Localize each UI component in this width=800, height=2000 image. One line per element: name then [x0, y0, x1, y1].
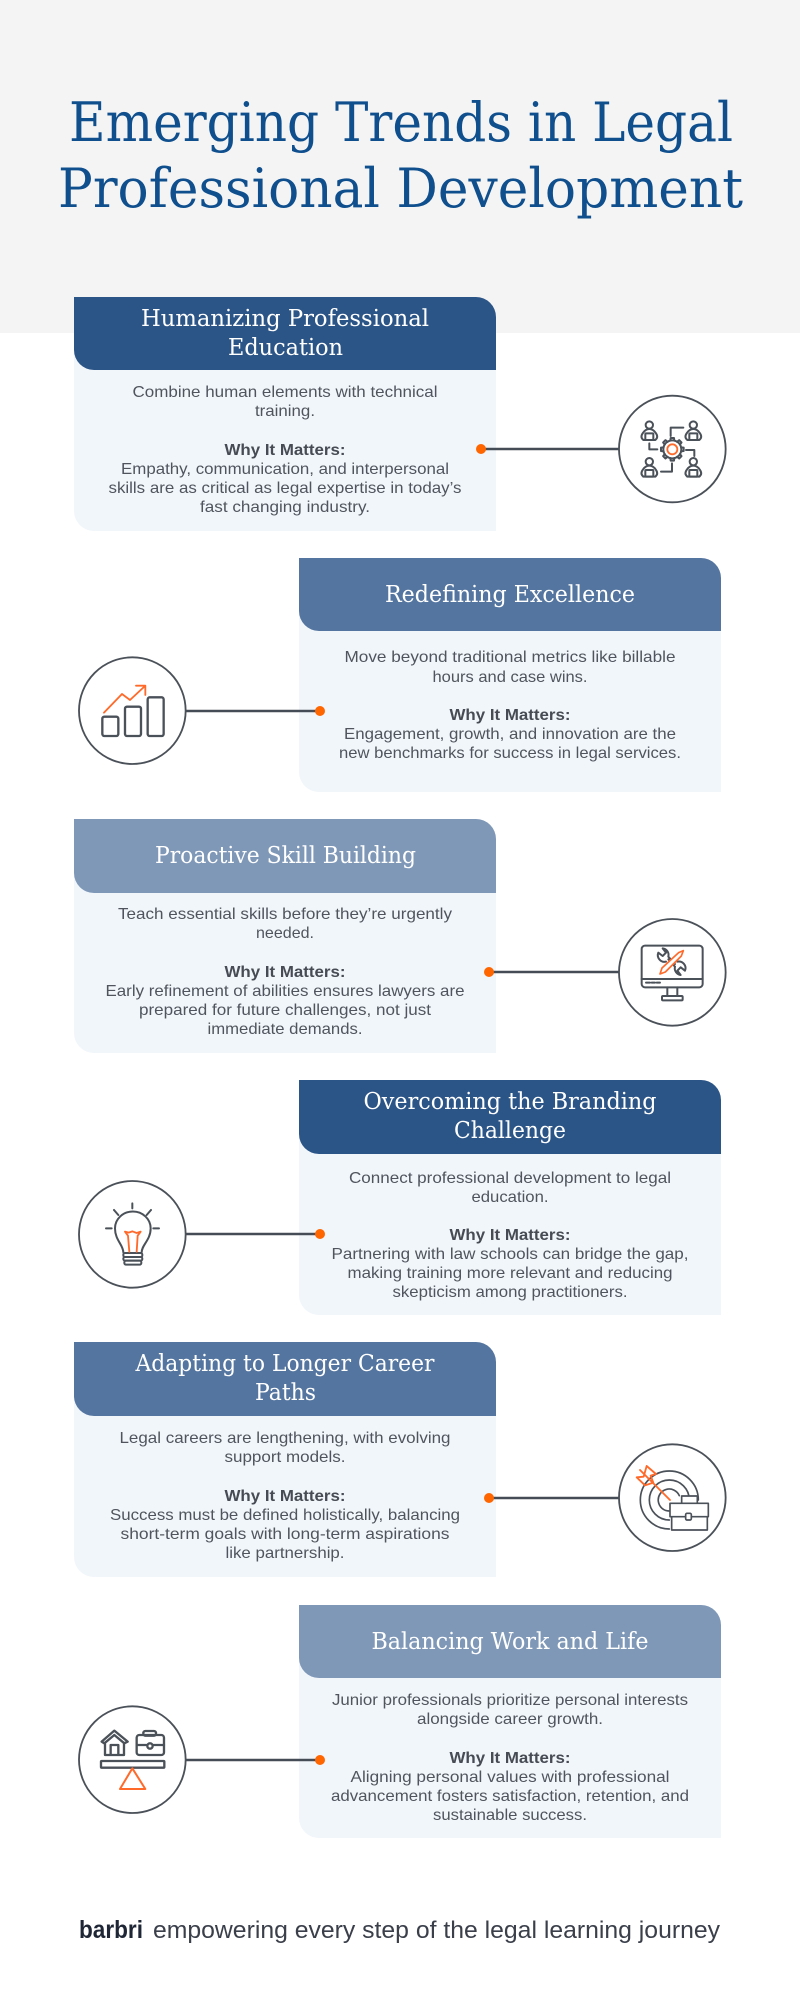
panel text: short-term goals with long-term aspirations — [120, 1526, 450, 1543]
panel text: Partnering with law schools can bridge the gap, — [332, 1246, 688, 1263]
footer: logo and tagline — [79, 1916, 720, 1944]
icon: people around gear — [619, 396, 726, 502]
panel text: Connect professional development to legal — [349, 1170, 671, 1187]
panel text: Why It Matters: — [224, 442, 346, 459]
title: Professional Development — [58, 157, 743, 220]
panel text: Legal careers are lengthening, with evolving — [120, 1430, 451, 1447]
panel heading: Balancing Work and Life — [372, 1627, 648, 1655]
panel text: skepticism among practitioners. — [392, 1284, 628, 1301]
panel: Overcoming the Branding Challenge — [299, 1080, 721, 1315]
panel text: Aligning personal values with professional — [350, 1769, 670, 1786]
connector: panel 4 to icon — [185, 1229, 325, 1239]
title — [58, 91, 743, 220]
panel text — [331, 1692, 689, 1824]
panel: Proactive Skill Building — [74, 819, 496, 1053]
panel text: Why It Matters: — [224, 1488, 346, 1505]
panel heading: Education — [228, 333, 343, 361]
panel text: Why It Matters: — [450, 1227, 570, 1244]
panel text — [106, 906, 465, 1038]
panel: Adapting to Longer Career Paths — [74, 1342, 496, 1577]
panel: Redefining Excellence — [299, 558, 721, 792]
panel text: immediate demands. — [208, 1021, 362, 1038]
title: Emerging Trends in Legal — [69, 91, 733, 154]
panel text — [339, 649, 681, 762]
panel text: Junior professionals prioritize personal interests — [332, 1692, 688, 1709]
panel text: making training more relevant and reducing — [348, 1265, 672, 1282]
panel text: advancement fosters satisfaction, retention, and — [331, 1788, 689, 1805]
panel text: support models. — [224, 1449, 346, 1466]
panel heading — [299, 1605, 721, 1678]
panel text: fast changing industry. — [200, 499, 370, 516]
panel text: prepared for future challenges, not just — [139, 1002, 432, 1019]
connector: panel 5 to icon — [484, 1493, 620, 1503]
icon: scale balancing home and briefcase — [79, 1706, 186, 1813]
panel heading: Paths — [255, 1378, 316, 1406]
panel text: needed. — [256, 925, 314, 942]
icon: light bulb — [79, 1181, 186, 1288]
panel text: Engagement, growth, and innovation are the — [344, 726, 676, 743]
connector: panel 1 to icon — [476, 444, 620, 454]
panel text: like partnership. — [226, 1545, 344, 1562]
panel text: Why It Matters: — [450, 1750, 570, 1767]
logo: barbri: barbri — [79, 1916, 143, 1944]
connector: panel 3 to icon — [484, 967, 620, 977]
connector: panel 2 to icon — [185, 706, 325, 716]
panel text: Success must be defined holistically, balancing — [110, 1507, 460, 1524]
panel heading — [74, 819, 496, 893]
panel text: Combine human elements with technical — [132, 384, 438, 401]
panel text: new benchmarks for success in legal services. — [339, 745, 681, 762]
panel text — [108, 384, 462, 516]
panel text: Why It Matters: — [224, 964, 346, 981]
panel heading — [299, 1080, 721, 1154]
panel text: Early refinement of abilities ensures lawyers are — [106, 983, 465, 1000]
panel text: Why It Matters: — [450, 707, 570, 724]
connector: panel 6 to icon — [185, 1755, 325, 1765]
icon: monitor with tools — [619, 919, 726, 1026]
icon: bar chart with rising arrow — [79, 657, 186, 764]
panel text — [332, 1170, 688, 1301]
panel text: alongside career growth. — [417, 1711, 603, 1728]
panel heading — [299, 558, 721, 631]
header band — [0, 0, 800, 333]
panel heading — [74, 1342, 496, 1416]
panel text — [110, 1430, 460, 1562]
tagline: empowering every step of the legal learning journey — [153, 1917, 720, 1944]
panel text: training. — [255, 403, 315, 420]
panel heading: Challenge — [454, 1116, 566, 1144]
panel heading: Redefining Excellence — [385, 580, 635, 608]
panel text: Move beyond traditional metrics like billable — [344, 649, 676, 666]
panel heading: Humanizing Professional — [141, 304, 429, 332]
panel: Humanizing Professional Education — [74, 297, 496, 531]
panel: Balancing Work and Life — [299, 1605, 721, 1838]
panel text: Teach essential skills before they’re urgently — [118, 906, 452, 923]
panel text: skills are as critical as legal expertise in today’s — [108, 480, 462, 497]
panel heading — [74, 297, 496, 370]
panel text: hours and case wins. — [432, 669, 588, 686]
panel heading: Overcoming the Branding — [364, 1087, 656, 1115]
panel text: Empathy, communication, and interpersonal — [121, 461, 449, 478]
panel text: sustainable success. — [433, 1807, 587, 1824]
panel heading: Adapting to Longer Career — [135, 1349, 435, 1377]
icon: target and briefcase — [619, 1444, 726, 1551]
panel text: education. — [472, 1189, 548, 1206]
panel heading: Proactive Skill Building — [155, 841, 416, 869]
